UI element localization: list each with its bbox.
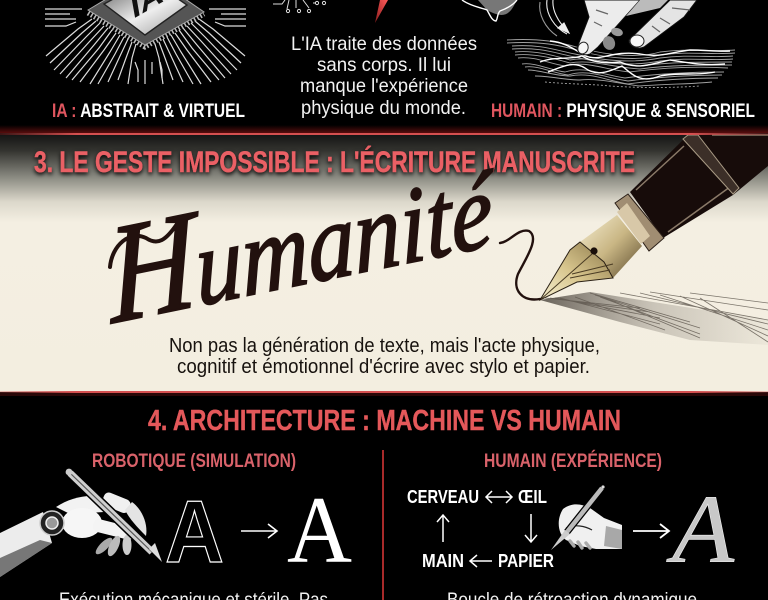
arrow [241, 524, 277, 538]
icon: fountain pen [540, 135, 768, 300]
panel: AI versus human senses [45, 0, 755, 122]
pen hatching shadow [540, 292, 768, 345]
letter: serif A: A [287, 477, 352, 583]
diagram: feedback loop: MAIN [422, 551, 464, 571]
subheading: human: HUMAIN (EXPÉRIENCE) [484, 450, 662, 472]
subheading: robotics: ROBOTIQUE (SIMULATION) [92, 451, 296, 472]
icon: small circuit [273, 0, 326, 13]
section rule bottom [0, 391, 768, 396]
panel: robotics simulation [0, 451, 352, 600]
letter: script A: A [666, 476, 735, 584]
caption: AI abstract and virtual: IA : ABSTRAIT & VIRTUEL [52, 101, 245, 122]
icon: AI microchip [45, 0, 246, 84]
handwritten word: Humanité [103, 120, 500, 354]
icon: human hand with pen [551, 485, 622, 550]
icon: tactile texture waves [507, 39, 735, 88]
icon: drop outline [462, 0, 517, 21]
icon: motion arrow [540, 0, 569, 36]
icon: human hand touching [576, 0, 697, 56]
text: AI lacks body: sans corps. Il lui [317, 54, 451, 76]
arrow [633, 524, 669, 538]
heading: section 4: 4. ARCHITECTURE : MACHINE VS HUMAIN [148, 405, 621, 437]
diagram: feedback loop [407, 487, 554, 571]
diagram: feedback loop: ŒIL [518, 487, 547, 507]
diagram: feedback loop: PAPIER [498, 551, 554, 571]
panel: section 3 handwriting [0, 120, 768, 392]
text: handwriting description: cognitif et émotionnel d'écrire avec stylo et papier. [177, 356, 590, 378]
letter: outlined A: A [165, 482, 224, 581]
divider [382, 450, 384, 600]
text: handwriting description: Non pas la génération de texte, mais l'acte physique, [169, 335, 600, 357]
icon: robot arm with pen [0, 469, 162, 577]
text: AI lacks body [291, 33, 477, 119]
icon: red lightning divider [375, 0, 388, 23]
panel: human experience [407, 450, 735, 600]
text: AI lacks body: manque l'expérience [300, 75, 468, 97]
text: AI lacks body: physique du monde. [301, 97, 466, 119]
text: handwriting description [169, 335, 600, 378]
text: AI lacks body: L'IA traite des données [291, 33, 477, 55]
diagram: feedback loop: CERVEAU [407, 487, 479, 507]
section rule top [0, 125, 768, 135]
